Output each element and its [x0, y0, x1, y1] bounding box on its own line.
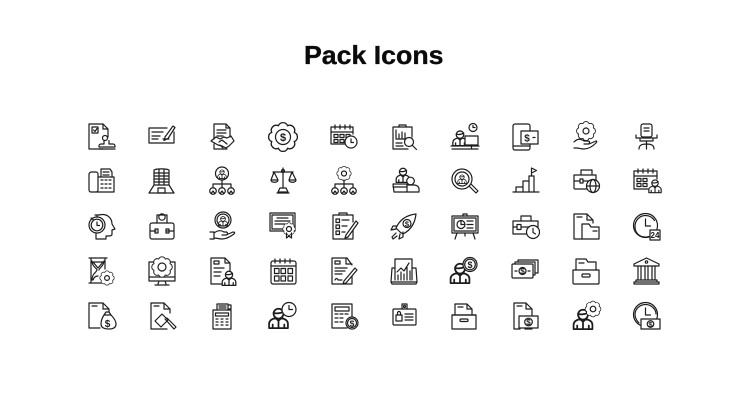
icon: person with coin	[451, 258, 477, 283]
icon: hand holding person	[210, 212, 235, 239]
icon: document with banknote: $	[526, 318, 531, 327]
icon: hand holding award	[574, 122, 597, 149]
icon: briefcase with person	[150, 214, 174, 239]
icon: calculator with coin: $	[350, 318, 355, 328]
icon: rocket with dollar: $	[405, 220, 410, 228]
icon: clock with banknote	[634, 302, 660, 329]
icon: magnifier on person	[452, 169, 478, 193]
icon: person with coin: $	[467, 260, 473, 270]
icon: gear with dollar: $	[280, 132, 286, 144]
icon: calculator with coin	[332, 304, 358, 329]
icon: scales of justice	[271, 168, 296, 193]
icon: document with money bag	[89, 303, 116, 330]
icon: stopwatch with head	[89, 215, 115, 239]
icon: 24-hour clock	[634, 214, 660, 240]
icon: calendar with person	[634, 169, 661, 193]
icon: person with gear	[574, 301, 601, 329]
icon: document tray	[452, 304, 476, 329]
icon: stack of banknotes	[512, 260, 538, 278]
icon: stack of banknotes: $	[520, 267, 525, 276]
icon: office chair	[636, 124, 657, 149]
icon: phone with banknote: $	[524, 134, 530, 144]
icon: document with money bag: $	[105, 319, 111, 330]
icon: clock with banknote: $	[648, 320, 653, 329]
icon grid	[89, 122, 661, 330]
icon: phone with banknote	[513, 124, 538, 150]
icon: contract with pen	[332, 258, 357, 284]
icon: person at desk with clock	[451, 124, 479, 149]
icon: 24-hour clock: 24	[651, 231, 660, 240]
icon: ID badge	[393, 304, 416, 325]
icon: document with stamp	[89, 124, 115, 149]
icon: team hierarchy	[210, 167, 234, 194]
icon: presentation board	[452, 214, 478, 239]
icon: interview at desk	[393, 168, 419, 192]
icon: calendar	[271, 259, 296, 284]
icon: bank	[634, 258, 659, 284]
icon: gear with dollar	[269, 123, 297, 151]
icon: office building	[149, 169, 174, 193]
icon: file tray with folder	[573, 259, 599, 284]
icon: document with handshake	[211, 124, 234, 149]
icon: document with folder	[574, 214, 599, 239]
icon: certificate with seal	[270, 213, 295, 238]
icon: cheque with pen	[149, 126, 175, 143]
title: Pack Icons	[304, 40, 444, 70]
icon: checklist with pen	[333, 213, 358, 239]
icon: clipboard with magnifier	[393, 125, 416, 150]
icon: gear hierarchy	[332, 166, 356, 194]
icon: steps with flag	[513, 168, 539, 192]
icon: briefcase with globe	[574, 170, 600, 192]
icon: calculator printer	[213, 304, 231, 329]
icon: briefcase with clock	[513, 216, 540, 238]
icon: monitor with gear	[149, 257, 175, 285]
icon: rocket with dollar	[391, 214, 416, 239]
icon: resume document	[211, 258, 236, 285]
icon: calendar with clock	[331, 125, 357, 148]
icon: fax phone	[89, 169, 114, 192]
icon: person with clock	[269, 302, 296, 328]
icon: document with banknote	[514, 303, 538, 329]
icon: document with gavel	[151, 303, 176, 329]
icon: laptop bar chart	[391, 259, 417, 284]
icon: hourglass with gear	[89, 258, 114, 285]
